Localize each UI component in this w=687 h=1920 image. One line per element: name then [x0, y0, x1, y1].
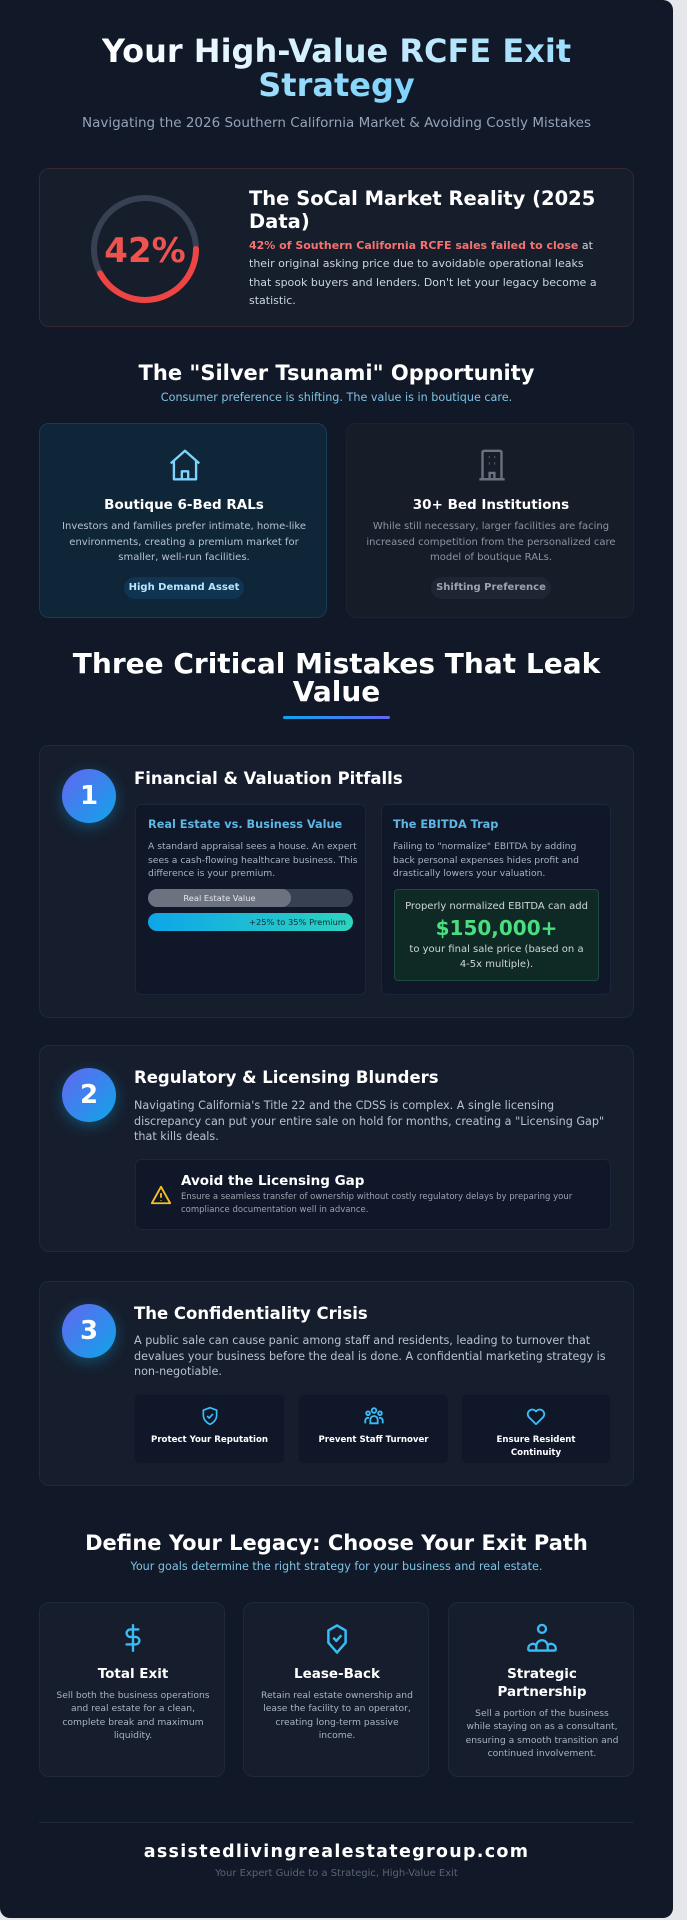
title: Financial & Valuation Pitfalls — [134, 769, 403, 788]
callout: green value box — [394, 889, 599, 981]
icon: building — [479, 450, 505, 480]
subheading: Your goals determine the right strategy for your business and real estate. — [130, 1560, 542, 1573]
icon: partnership — [527, 1624, 557, 1652]
heading: three critical mistakes: Value — [293, 675, 380, 708]
panel: market reality — [39, 168, 634, 327]
text: A public sale can cause panic among staff and residents, leading to turnover that devalues your business before the deal is done. A confidential marketing strategy is non-negotiable. — [134, 1334, 606, 1378]
card: strategic partnership: Partnership — [497, 1684, 587, 1700]
card: lease-back: Lease-Back — [294, 1666, 380, 1682]
number badge: 3 — [80, 1316, 98, 1346]
bar chart: Real Estate Value — [183, 893, 256, 903]
text: Investors and families prefer intimate, home-like environments, creating a premium market for smaller, well-run facilities. — [62, 521, 306, 563]
callout: green value box: $150,000+ — [436, 916, 557, 940]
card: lease-back: Retain real estate ownership and lease the facility to an operator, creating long-term passive income. — [261, 1690, 413, 1741]
card: EBITDA trap — [381, 804, 611, 995]
chart: 42% ring — [91, 195, 199, 303]
pill — [124, 577, 244, 599]
heading: three critical mistakes — [72, 647, 601, 708]
number badge — [62, 1068, 116, 1122]
card: lease-back — [243, 1602, 429, 1777]
heading: three critical mistakes: Three Critical Mistakes That Leak — [73, 647, 600, 680]
card: real estate vs business: Real Estate vs. Business Value — [148, 818, 342, 831]
callout: licensing gap — [135, 1159, 611, 1230]
number badge: 2 — [80, 1080, 98, 1110]
icon: house — [170, 450, 200, 480]
card: total exit — [39, 1602, 225, 1777]
card: total exit: Sell both the business operations and real estate for a clean, complete break and maximum liquidity. — [56, 1690, 210, 1741]
heading: silver tsunami: The "Silver Tsunami" Opportunity — [139, 361, 534, 385]
panel: institutions — [346, 423, 634, 618]
number badge — [62, 769, 116, 823]
item: residents: Continuity — [511, 1448, 561, 1458]
text: Navigating California's Title 22 and the CDSS is complex. A single licensing discrepancy can put your entire sale on hold for months, creating a "Licensing Gap" that kills deals. — [134, 1099, 604, 1143]
card: total exit: Total Exit — [98, 1666, 168, 1682]
card: strategic partnership — [448, 1602, 634, 1777]
callout: green value box: Properly normalized EBITDA can add — [405, 901, 588, 912]
pill: High Demand Asset — [129, 582, 239, 593]
item: staff: Prevent Staff Turnover — [318, 1435, 429, 1445]
item: staff — [298, 1394, 449, 1464]
title: Boutique 6-Bed RALs — [104, 497, 264, 513]
title — [102, 32, 571, 104]
item: residents — [461, 1394, 611, 1464]
bar chart: +25% to 35% Premium — [249, 917, 346, 927]
heading: define legacy: Define Your Legacy: Choose Your Exit Path — [85, 1531, 588, 1555]
title: Your High-Value RCFE Exit — [102, 32, 571, 70]
icon: dollar — [125, 1624, 141, 1652]
title: 30+ Bed Institutions — [413, 497, 569, 513]
subheading: Consumer preference is shifting. The value is in boutique care. — [161, 391, 512, 404]
title: The Confidentiality Crisis — [134, 1304, 368, 1323]
footer tagline: Your Expert Guide to a Strategic, High-Value Exit — [215, 1868, 458, 1879]
card: strategic partnership: Strategic — [507, 1666, 577, 1682]
card: real estate vs business: A standard appraisal sees a house. An expert sees a cash-flowing healthcare business. This difference is your premium. — [148, 841, 358, 879]
icon: warning — [150, 1186, 172, 1204]
pill: Shifting Preference — [436, 582, 546, 593]
panel: boutique — [39, 423, 327, 618]
number badge: 1 — [80, 781, 98, 811]
pill — [431, 577, 551, 599]
card: real estate vs business — [135, 804, 366, 995]
callout: licensing gap: Avoid the Licensing Gap — [181, 1173, 364, 1189]
panel: mistake 1 — [39, 745, 634, 1018]
item: reputation — [134, 1394, 285, 1464]
footer domain: assistedlivingrealestategroup.com — [144, 1842, 529, 1862]
item: residents: Ensure Resident — [496, 1435, 576, 1445]
body text: 42% of Southern California RCFE sales failed to close at their original asking price due to avoidable operational leaks that spook buyers and lenders. Don't let your legacy become a statistic. — [249, 239, 597, 307]
title: Regulatory & Licensing Blunders — [134, 1068, 439, 1087]
number badge — [62, 1304, 116, 1358]
panel: mistake 3 — [39, 1281, 634, 1486]
card: EBITDA trap: The EBITDA Trap — [393, 818, 498, 831]
heading: The SoCal Market Reality (2025 Data) — [249, 187, 595, 233]
callout: green value box: to your final sale price (based on a 4-5x multiple). — [409, 944, 584, 970]
panel: mistake 2 — [39, 1045, 634, 1252]
chart: 42% ring: 42% — [104, 231, 186, 271]
item: reputation: Protect Your Reputation — [151, 1435, 268, 1445]
bar chart — [148, 889, 353, 931]
icon: shield — [327, 1624, 347, 1654]
card: strategic partnership: Sell a portion of the business while staying on as a consultant, ensuring a smooth transition and continued involvement. — [466, 1708, 618, 1759]
callout: licensing gap: Ensure a seamless transfer of ownership without costly regulatory delays by preparing your compliance documentation well in advance. — [181, 1192, 572, 1215]
text: While still necessary, larger facilities are facing increased competition from the personalized care model of boutique RALs. — [366, 521, 616, 563]
card: EBITDA trap: Failing to "normalize" EBITDA by adding back personal expenses hides profit and drastically lowers your valuation. — [393, 841, 579, 879]
title: Strategy — [258, 66, 415, 104]
subtitle: Navigating the 2026 Southern California Market & Avoiding Costly Mistakes — [82, 115, 591, 131]
